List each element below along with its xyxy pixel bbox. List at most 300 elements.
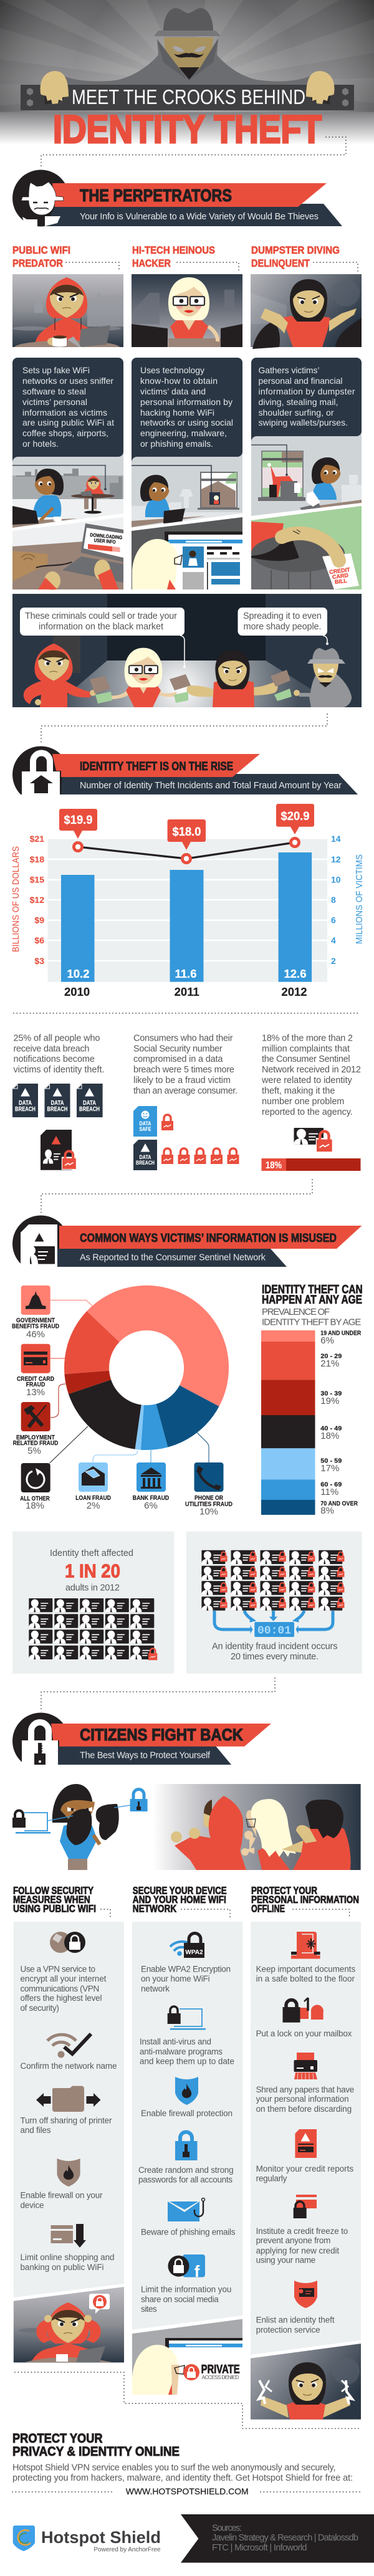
age labels: 40 - 49 — [320, 1425, 342, 1433]
crook illustration — [64, 8, 310, 85]
icon: globe and lock — [50, 1932, 85, 1953]
text: dumpster: diving, stealing mail, — [258, 397, 338, 407]
scene: boxer woman — [47, 1784, 130, 1870]
icon: five locks — [161, 1148, 239, 1164]
dotted connector — [41, 137, 346, 168]
title line 1: MEET THE CROOKS BEHIND — [72, 85, 305, 108]
stat: 25 percent: 25% of all people who — [14, 1034, 100, 1044]
heading: CITIZENS FIGHT BACK — [80, 1725, 243, 1744]
chart: fraud amount and victims — [11, 804, 365, 998]
fraud: credit card: FRAUD — [26, 1381, 46, 1388]
callout: 19.9: $19.9 — [64, 813, 93, 827]
tip text — [20, 1965, 107, 2013]
axis: left dollars: $12 — [30, 895, 44, 905]
age labels: 19% — [320, 1396, 339, 1406]
tip text: of security) — [20, 2003, 59, 2013]
stacked bar — [261, 1330, 315, 1515]
text: hacker: know-how to obtain — [140, 376, 218, 386]
tip text: regularly — [256, 2174, 287, 2183]
icon: phishing mail — [168, 2198, 204, 2221]
icon: masked man — [21, 182, 64, 226]
scene: coffee shop — [12, 465, 123, 590]
icon: single lock — [161, 1115, 173, 1130]
tip text — [141, 1965, 231, 1993]
scene: access denied — [132, 2319, 242, 2395]
heading — [262, 1284, 363, 1328]
tip text: Limit the information you — [141, 2284, 231, 2294]
column heading: offline: OFFLINE — [251, 1903, 285, 1914]
text: dumpster — [258, 365, 355, 427]
stat: 5 times: compromised in a data — [133, 1054, 223, 1064]
section header: the perpetrators — [12, 169, 342, 227]
fraud: bank: 6% — [144, 1500, 158, 1511]
column heading: public wifi predator: PUBLIC WIFI — [12, 244, 70, 256]
age labels: 21% — [320, 1358, 339, 1369]
fraud: employment: RELATED FRAUD — [13, 1439, 59, 1447]
callout: 20.9 — [276, 804, 314, 834]
label: credit card bill — [329, 566, 352, 586]
speech bubble 1: information on the black market — [39, 622, 163, 632]
age labels: 19 AND UNDER — [320, 1330, 362, 1337]
column heading: public wifi: FOLLOW SECURITY — [13, 1884, 94, 1896]
stat: 5 times — [133, 1034, 239, 1170]
red ribbon — [59, 1226, 362, 1249]
navy ribbon — [61, 774, 358, 794]
logo: hotspot shield — [13, 2526, 161, 2554]
stat: 25 percent — [12, 1034, 105, 1170]
tip text: Keep important documents — [256, 1965, 355, 1974]
callout: 18.0 — [168, 819, 206, 850]
icon: three data breach documents: BREACH — [79, 1106, 100, 1113]
icon grid: id cards — [29, 1598, 157, 1660]
speech bubble 2: Spreading it to even — [243, 611, 322, 621]
bar values: 11.6 — [175, 967, 197, 980]
icon: data breach document — [133, 1140, 157, 1170]
fraud: government benefits: BENEFITS FRAUD — [12, 1323, 59, 1330]
panel: offline tips — [251, 1922, 361, 2355]
tip text: protection service — [256, 2326, 320, 2335]
text: hacker: hacking home WiFi — [140, 408, 214, 417]
subheading: As Reported to the Consumer Sentinel Network — [80, 1253, 266, 1263]
text: predator — [22, 365, 114, 449]
tip text: Enlist an identity theft — [256, 2316, 335, 2325]
icon: shredder — [294, 2053, 317, 2079]
axis: right victims: 2 — [331, 956, 336, 966]
fraud: credit card: 13% — [26, 1387, 45, 1398]
stat: 25 percent: receive data breach — [14, 1044, 90, 1054]
panel: 20 times every minute: 20 times every minute. — [231, 1652, 319, 1662]
tip text: your personal information — [256, 2094, 349, 2104]
big stat: 1 IN 20 — [65, 1560, 120, 1582]
tip text: Shred any papers that have — [256, 2085, 354, 2094]
icon: wifi wpa2: WPA2 — [185, 1949, 203, 1956]
icon: blue lock key — [175, 2132, 197, 2160]
tip text: and files — [20, 2125, 51, 2135]
age labels: 50 - 59 — [320, 1457, 342, 1465]
tip text: encrypt all your internet — [20, 1974, 107, 1983]
stat: 18 percent: number one problem — [262, 1097, 344, 1107]
years: 2012 — [281, 985, 307, 998]
text: predator: software to steal — [22, 386, 86, 396]
tip text: Turn off sharing of printer — [20, 2116, 112, 2125]
column heading: dumpster diving delinquent — [251, 244, 340, 269]
timer: 00:01 — [257, 1625, 291, 1638]
tip text: Beware of phishing emails — [141, 2227, 236, 2236]
panel: hacker illustration — [132, 274, 242, 347]
tip text — [138, 2165, 234, 2185]
column heading: hi-tech heinous hacker: HI-TECH HEINOUS — [132, 244, 215, 256]
stat: 5 times: likely to be a fraud victim — [133, 1076, 231, 1085]
icon: three data breach documents: DATA — [51, 1100, 64, 1107]
heading: IDENTITY THEFT IS ON THE RISE — [80, 760, 233, 773]
speech bubble 2 — [238, 608, 328, 645]
title banner — [21, 85, 354, 110]
subheading: The Best Ways to Protect Yourself — [80, 1751, 211, 1761]
label: credit card bill: CARD — [332, 572, 349, 580]
text: predator: are using public WiFi at — [22, 417, 114, 427]
callout: 19.9 — [59, 809, 97, 839]
column heading: public wifi predator — [12, 244, 70, 269]
label: credit card bill: CREDIT — [329, 566, 351, 575]
tip text: Enable WPA2 Encryption — [141, 1965, 231, 1974]
icon: three data breach documents: DATA — [19, 1100, 32, 1107]
closing text: protecting you from hackers, malware, and identity theft. Get Hotspot Shield for free at: — [12, 2473, 353, 2483]
axis: left dollars: $6 — [34, 935, 44, 945]
axis: right victims — [331, 834, 341, 966]
section header: common ways — [9, 1215, 362, 1274]
fraud: phone: PHONE OR — [194, 1494, 223, 1502]
column heading: home wifi: NETWORK — [133, 1903, 177, 1914]
logo: hotspot shield: Powered by AnchorFree — [94, 2546, 161, 2554]
axis: right victims: 6 — [331, 915, 336, 925]
closing heading: PRIVACY & IDENTITY ONLINE — [12, 2444, 180, 2459]
panel: home network tips — [132, 1922, 242, 2330]
stat: 18 percent: 18% of the more than 2 — [262, 1034, 353, 1044]
speech bubble 1: These criminals could sell or trade your — [25, 611, 177, 621]
tip text: Enable firewall protection — [141, 2109, 233, 2118]
icon: blue firewall shield — [175, 2077, 198, 2105]
icon: three data breach documents: BREACH — [47, 1106, 67, 1113]
subheading: Number of Identity Theft Incidents and Total Fraud Amount by Year — [80, 781, 342, 791]
stat: 18 percent: Network received in 2012 — [262, 1065, 361, 1075]
tip text: device — [20, 2200, 44, 2210]
icon: red report document — [295, 2129, 317, 2158]
label: credit card bill: BILL — [334, 578, 348, 585]
scene: dumpster window — [251, 445, 362, 589]
title: Identity Theft: IDENTITY THEFT — [53, 108, 322, 151]
gloves — [67, 1809, 92, 1845]
icon: breach document with id — [41, 1130, 77, 1170]
age labels: 70 AND OVER — [320, 1500, 358, 1507]
tip text: sites — [141, 2304, 157, 2314]
heading: THE PERPETRATORS — [80, 186, 232, 205]
years: 2010 — [64, 985, 90, 998]
axis: left dollars: $21 — [30, 834, 44, 844]
icon: data breach document: DATA — [140, 1154, 151, 1161]
panel: 20 times every minute — [186, 1532, 362, 1674]
tip text: passwords for all accounts — [138, 2175, 233, 2185]
tip text: communications (VPN — [20, 1984, 99, 1993]
scene: worried predator — [14, 2287, 124, 2362]
stat: 18 percent — [261, 1034, 361, 1171]
age labels — [320, 1330, 362, 1516]
tip text — [141, 2284, 231, 2314]
tip text: Monitor your credit reports — [256, 2164, 353, 2173]
icon: card with arrow — [51, 2224, 86, 2248]
label: private: PRIVATE — [201, 2363, 240, 2376]
axis title left: BILLIONS OF US DOLLARS — [11, 846, 21, 952]
axis: right victims: 4 — [331, 935, 336, 945]
fraud: government benefits: GOVERNMENT — [16, 1317, 55, 1324]
red ribbon — [52, 754, 260, 777]
icon: data safe document — [133, 1106, 157, 1137]
age labels: 6% — [320, 1335, 334, 1346]
text: hacker: engineering, malware, — [140, 428, 227, 438]
tip text — [256, 2226, 348, 2265]
axis: left dollars: $18 — [30, 854, 44, 864]
panel: 20 times every minute: An identity fraud incident occurs — [212, 1642, 338, 1652]
hero background — [0, 0, 374, 145]
sources bar — [181, 2514, 374, 2563]
wallets and money — [90, 670, 292, 704]
age labels: 20 - 29 — [320, 1353, 342, 1360]
tip text — [20, 2116, 112, 2135]
subheading: Your Info is Vulnerable to a Wide Variety of Would Be Thieves — [80, 212, 319, 222]
tip text: network — [141, 1984, 170, 1993]
column heading: public wifi — [13, 1884, 96, 1914]
tip text: Use a VPN service to — [20, 1965, 95, 1974]
text: hacker: personal information by — [140, 397, 233, 407]
character: hooded predator — [24, 644, 96, 707]
panel: predator description — [12, 358, 123, 590]
panel: predator illustration — [12, 274, 123, 347]
bar values: 10.2 — [67, 967, 90, 980]
sources bar: Javelin Strategy & Research | Datalossdb — [212, 2533, 358, 2543]
closing heading — [12, 2431, 180, 2459]
icon: safe — [291, 1932, 320, 1959]
axis: right victims: 12 — [331, 854, 341, 864]
column heading: hi-tech heinous hacker — [132, 244, 215, 269]
axis: left dollars: $9 — [34, 915, 44, 925]
tip text: Limit online shopping and — [20, 2253, 115, 2262]
stat: 5 times: Consumers who had their — [133, 1034, 233, 1044]
timer — [254, 1622, 294, 1638]
icon: blue lock with key — [130, 1790, 148, 1811]
stat: 18 percent: million complaints that — [262, 1044, 350, 1054]
chart: donut of fraud types — [64, 1286, 229, 1450]
fraud: employment: 5% — [27, 1446, 41, 1456]
sources bar: FTC | Microsoft | Infoworld — [212, 2543, 307, 2553]
bar values — [67, 967, 307, 980]
axis: left dollars: $3 — [34, 956, 44, 966]
icon: red lock — [183, 2364, 199, 2380]
fraud: government benefits — [12, 1286, 59, 1340]
icon: three data breach documents: DATA — [83, 1100, 96, 1107]
text: predator: or hotels. — [22, 439, 59, 449]
dotted connector — [41, 714, 327, 743]
stat: 5 times: Social Security number — [133, 1044, 223, 1054]
age labels: 60 - 69 — [320, 1481, 342, 1489]
tip text: Institute a credit freeze to — [256, 2226, 348, 2236]
tip text: anti-malware programs — [140, 2047, 223, 2056]
fraud: phone — [185, 1462, 233, 1517]
stat: 25 percent: victims of identity theft. — [14, 1065, 105, 1075]
column heading: hi-tech heinous hacker: HACKER — [132, 257, 171, 269]
icon: red shield with id — [294, 2281, 317, 2308]
fraud: bank: BANK FRAUD — [133, 1494, 170, 1502]
icon: mailbox lock — [283, 1998, 324, 2023]
icon: lock and facebook — [168, 2254, 205, 2281]
fraud: all other: ALL OTHER — [20, 1495, 50, 1502]
character: blonde hacker — [110, 648, 176, 707]
icon: wifi wpa2 — [170, 1933, 204, 1958]
icon grid: id cards with locks — [201, 1550, 344, 1611]
age labels: 11% — [320, 1487, 338, 1497]
column heading: public wifi: USING PUBLIC WIFI — [13, 1903, 96, 1914]
stat: 18 percent: were related to identity — [261, 1076, 352, 1085]
panel: age prevalence — [261, 1284, 363, 1516]
label: downloading — [89, 532, 123, 545]
bar values: 12.6 — [284, 967, 307, 980]
logo: hotspot shield: Hotspot Shield — [41, 2528, 161, 2547]
section header: citizens fight back — [9, 1712, 271, 1772]
tip text: using your name — [256, 2256, 315, 2265]
tip text: offers the highest level — [20, 1993, 102, 2003]
tip text: prevent anyone from — [256, 2236, 330, 2245]
panel: 1 in 20: Identity theft affected — [50, 1548, 133, 1558]
tip text: Install anti-virus and — [140, 2037, 211, 2046]
icon: data safe document: SAFE — [140, 1126, 151, 1133]
url: WWW.HOTSPOTSHIELD.COM — [126, 2486, 249, 2496]
axis: right victims: 8 — [331, 895, 336, 905]
tip text: in a safe bolted to the floor — [256, 1974, 355, 1983]
tip text: on them before discarding — [256, 2104, 352, 2114]
character: crook — [294, 648, 352, 707]
character: dumpster diver — [186, 651, 278, 707]
icon: data safe document: DATA — [140, 1120, 151, 1127]
tip text — [20, 2191, 103, 2210]
scene: worried dumpster diver — [251, 2344, 361, 2420]
text: hacker: Uses technology — [140, 365, 204, 375]
column heading: offline: PROTECT YOUR — [251, 1884, 317, 1896]
icon: lock and key — [22, 1722, 58, 1765]
icon: card lock — [294, 2195, 317, 2218]
tip text — [140, 2037, 234, 2066]
bars — [61, 852, 312, 982]
panel: dumpster illustration — [251, 274, 362, 349]
icon: lock and facebook: f — [194, 2262, 200, 2281]
icon: wifi check — [47, 2034, 91, 2058]
text: predator: coffee shops, airports, — [22, 428, 108, 438]
tip text: on your home WiFi — [141, 1974, 210, 1983]
fraud: all other: 18% — [26, 1500, 44, 1511]
column heading: public wifi predator: PREDATOR — [12, 257, 63, 269]
axis: left dollars — [30, 834, 44, 966]
age labels: 18% — [320, 1431, 339, 1441]
closing text — [12, 2463, 353, 2483]
red ribbon — [51, 1724, 271, 1747]
fraud: loan: 2% — [87, 1500, 100, 1511]
stat: 18 percent: reported to the agency. — [262, 1107, 353, 1117]
icon: brown firewall shield — [57, 2159, 80, 2187]
icon: speech bubble lock — [89, 2294, 110, 2314]
speech bubble 1 — [20, 608, 186, 668]
icon: laptop lock — [12, 1811, 50, 1833]
icon: id with lock — [294, 1128, 333, 1152]
text: hacker: victims’ data and — [140, 386, 206, 396]
fraud: employment — [13, 1402, 59, 1456]
text: predator: information as victims — [22, 408, 107, 417]
column heading: home wifi — [133, 1884, 227, 1914]
panel: black market scene — [12, 594, 362, 707]
red ribbon — [52, 183, 327, 207]
fraud: government benefits: 46% — [26, 1329, 45, 1340]
axis: left dollars: $15 — [30, 875, 44, 885]
panel: 1 in 20: adults in 2012 — [65, 1583, 120, 1593]
fraud: credit card — [17, 1344, 54, 1398]
axis: right victims: 14 — [331, 834, 341, 844]
icon: crook hands — [41, 71, 334, 105]
scene: home network — [132, 465, 242, 589]
text: predator: networks or uses sniffer — [22, 376, 113, 386]
navy ribbon — [57, 1249, 287, 1267]
stat: 25 percent: notifications become — [14, 1054, 95, 1064]
section header: on the rise — [9, 747, 358, 807]
tip text — [256, 1965, 355, 1983]
age labels: 30 - 39 — [320, 1390, 342, 1398]
stat: 5 times: than an average consumer. — [133, 1086, 237, 1096]
text: predator: Sets up fake WiFi — [22, 365, 90, 375]
heading: PREVALENCE OF — [262, 1307, 330, 1317]
tip text — [256, 2316, 335, 2335]
column heading: dumpster diving delinquent: DELINQUENT — [251, 257, 310, 269]
closing text: Hotspot Shield VPN service enables you to surf the web anonymously and securely, — [12, 2463, 335, 2473]
text: hacker: or phishing emails. — [140, 439, 213, 449]
fraud: employment: EMPLOYMENT — [16, 1434, 55, 1441]
tip text: Confirm the network name — [20, 2061, 117, 2071]
line series — [72, 837, 300, 864]
icon: laptop lock — [168, 2006, 206, 2030]
axis title right: MILLIONS OF VICTIMS — [354, 854, 365, 944]
tip text — [256, 2164, 353, 2183]
arrows to timer — [214, 1611, 333, 1633]
text: dumpster: swiping wallets/purses. — [258, 417, 348, 427]
tip text: applying for new credit — [256, 2246, 339, 2255]
navy ribbon — [58, 1746, 231, 1765]
tip text: Put a lock on your mailbox — [256, 2029, 352, 2038]
axis: right victims: 10 — [331, 875, 341, 885]
text: predator: victims’ personal — [22, 397, 87, 407]
stat: 5 times: breach were 5 times more — [133, 1065, 234, 1075]
age labels: 17% — [320, 1463, 339, 1474]
icon: data breach document: BREACH — [136, 1160, 155, 1166]
bar: 18 percent — [262, 1158, 360, 1171]
years: 2011 — [175, 985, 199, 998]
tip text: Create random and strong — [138, 2165, 234, 2175]
icon: three data breach documents — [12, 1084, 103, 1117]
bar: 18 percent: 18% — [266, 1160, 282, 1171]
fraud: credit card: CREDIT CARD — [17, 1375, 54, 1383]
panel: public wifi tips — [14, 1922, 124, 2297]
icon: lock with up arrow — [22, 753, 60, 794]
tip text — [20, 2253, 115, 2272]
text: hacker — [140, 365, 233, 449]
callout: 18.0: $18.0 — [172, 825, 201, 839]
text: dumpster: Gathers victims’ — [258, 365, 319, 375]
tip text — [256, 2085, 354, 2114]
icon: three data breach documents: BREACH — [15, 1106, 36, 1113]
tip text: banking on public WiFi — [20, 2263, 103, 2272]
